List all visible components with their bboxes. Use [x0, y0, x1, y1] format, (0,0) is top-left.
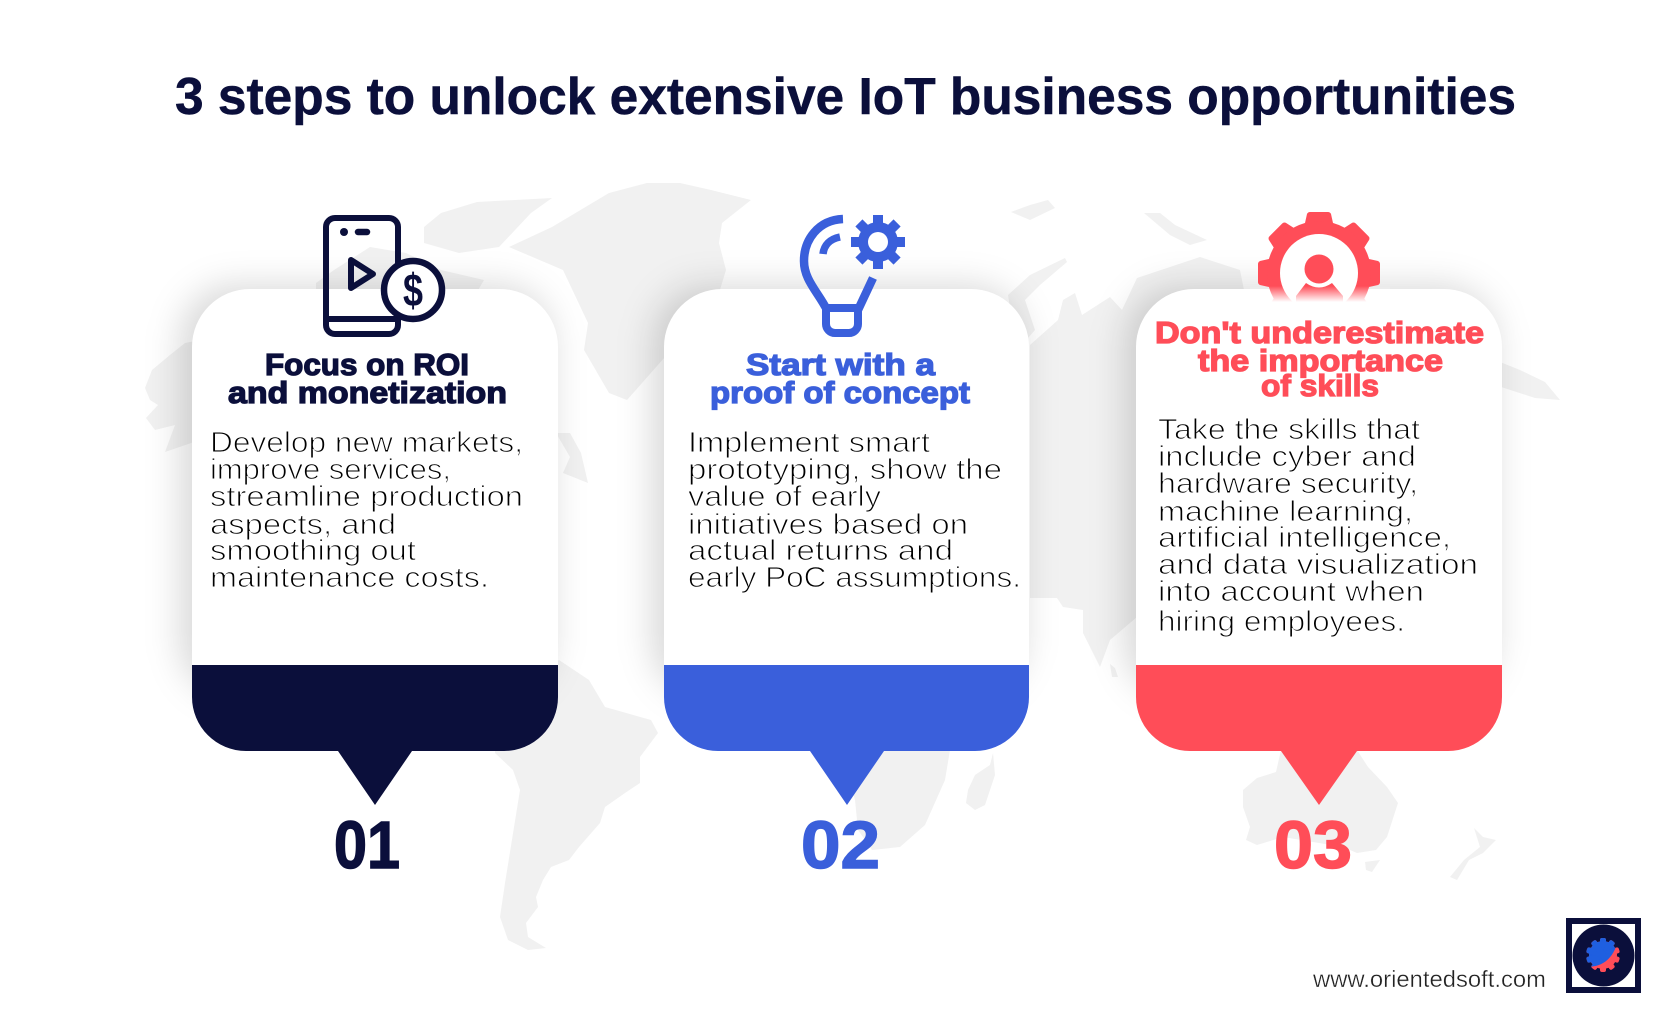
- card body 3: [1136, 289, 1502, 665]
- body text 1: improve services,: [210, 454, 451, 486]
- card body 2: [664, 289, 1029, 665]
- heading 2: Start with a: [746, 347, 936, 382]
- body text 3: artificial intelligence,: [1158, 522, 1451, 554]
- body text 1: smoothing out: [210, 535, 416, 567]
- heading 1: and monetization: [228, 375, 507, 410]
- body text 3: Take the skills that: [1158, 414, 1420, 446]
- card shadows: [180, 285, 1496, 697]
- icon: phone with play button and coin: $: [403, 264, 423, 316]
- panel: step 1: [192, 218, 558, 883]
- body text 1: Develop new markets,: [210, 427, 523, 459]
- heading 2: [710, 347, 970, 410]
- icon: light bulb with gear: [804, 215, 905, 333]
- body text 2: actual returns and: [688, 535, 953, 567]
- body text 1: [210, 427, 523, 594]
- body text 2: initiatives based on: [688, 509, 968, 541]
- body text 3: and data visualization: [1158, 549, 1478, 581]
- card body 1: [192, 289, 558, 665]
- number 01: 01: [334, 808, 400, 883]
- icon: gear with person: [1258, 212, 1380, 302]
- number 03: 03: [1274, 808, 1352, 883]
- body text 3: hardware security,: [1158, 468, 1418, 500]
- heading 2: proof of concept: [710, 375, 970, 410]
- body text 3: machine learning,: [1158, 496, 1413, 528]
- body text 3: hiring employees.: [1158, 606, 1405, 638]
- title: 3 steps to unlock extensive IoT business opportunities: [175, 68, 1516, 126]
- colour band with pointer 3: [1136, 665, 1502, 805]
- world map background: [145, 183, 1560, 950]
- body text 2: value of early: [688, 481, 882, 513]
- heading 3: the importance: [1198, 343, 1443, 378]
- body text 2: early PoC assumptions.: [688, 562, 1021, 594]
- logo: [1569, 921, 1638, 990]
- panel: step 2: [664, 215, 1029, 883]
- body text 2: prototyping, show the: [688, 454, 1002, 486]
- number 02: 02: [801, 808, 880, 883]
- heading 3: of skills: [1261, 368, 1379, 403]
- colour band with pointer 2: [664, 665, 1029, 805]
- icon: phone with play button and coin: [326, 218, 442, 334]
- body text 3: into account when: [1158, 576, 1424, 608]
- body text 2: [688, 427, 1021, 594]
- colour band with pointer 1: [192, 665, 558, 805]
- heading 1: Focus on ROI: [265, 347, 469, 382]
- heading 3: Don't underestimate: [1155, 315, 1484, 350]
- heading 3: [1155, 315, 1484, 403]
- panel: step 3: [1136, 212, 1502, 883]
- heading 1: [228, 347, 507, 410]
- body text 2: Implement smart: [688, 427, 930, 459]
- body text 1: aspects, and: [210, 509, 396, 541]
- body text 3: [1158, 414, 1478, 638]
- website url: www.orientedsoft.com: [1312, 966, 1546, 992]
- body text 1: maintenance costs.: [210, 562, 489, 594]
- body text 1: streamline production: [210, 481, 523, 513]
- body text 3: include cyber and: [1158, 441, 1416, 473]
